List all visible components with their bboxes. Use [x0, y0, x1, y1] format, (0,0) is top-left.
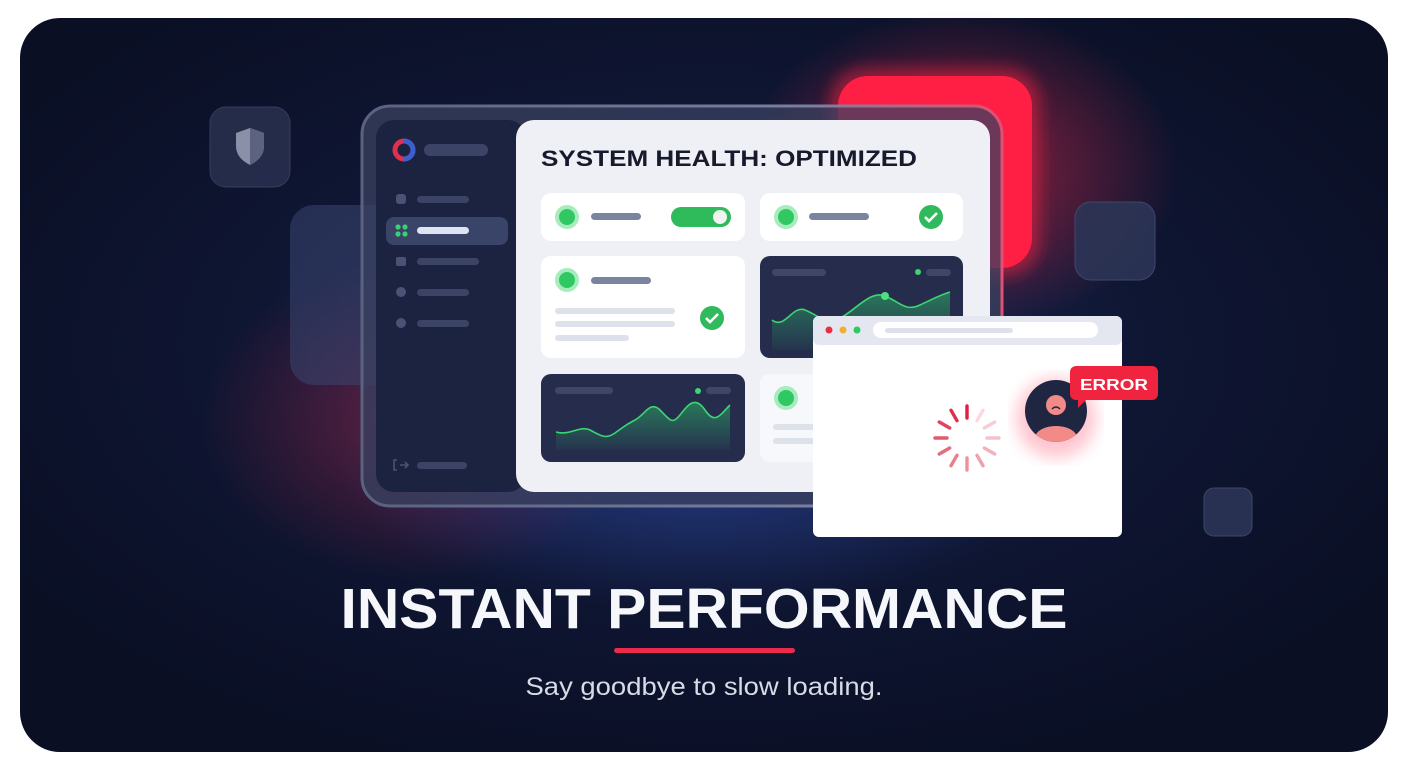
card: toggle: [541, 193, 745, 241]
avatar: sad user: [1016, 378, 1096, 458]
tile: small glass: [1204, 488, 1252, 536]
browser window: [813, 316, 1122, 537]
card: chart right: [760, 256, 963, 358]
main panel: [516, 120, 990, 492]
tile: right glass: [1075, 202, 1155, 280]
tile: shield icon: [210, 107, 290, 187]
icon: loading spinner: [935, 406, 999, 470]
device frame: [362, 106, 1002, 506]
subtitle: Say goodbye to slow loading.: [526, 673, 882, 701]
panel heading: SYSTEM HEALTH: OPTIMIZED: [541, 146, 917, 171]
sidebar: [376, 120, 526, 492]
tile: left blurred square: [290, 205, 400, 385]
card: status list: [541, 256, 745, 358]
red underline: [614, 648, 795, 653]
callout: error: ERROR: [1080, 377, 1149, 394]
card: partial: [760, 374, 963, 462]
card: chart left: [541, 374, 745, 462]
tile: red square: [830, 68, 1040, 276]
card: check: [760, 193, 963, 241]
main title: INSTANT PERFORMANCE: [340, 577, 1068, 641]
callout: error: [1070, 366, 1158, 408]
